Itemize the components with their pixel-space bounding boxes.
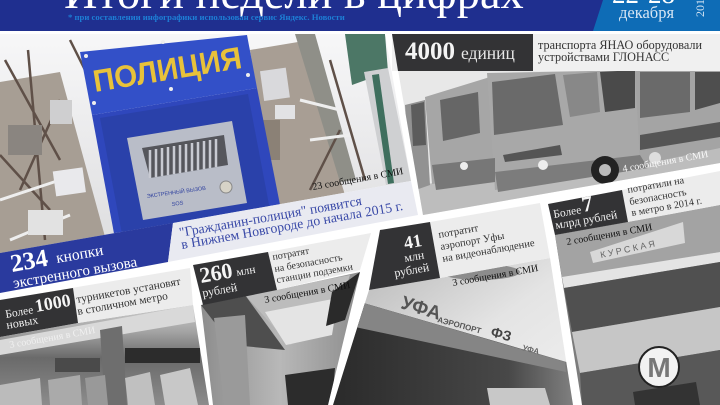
date block: декабря [619, 3, 674, 22]
stat: 41 million: млн [403, 248, 426, 265]
intercom plate [127, 121, 247, 220]
stat: 41 million [369, 203, 550, 290]
stat: 4000 units [392, 34, 720, 71]
photo: police call box [0, 34, 420, 259]
media count: buses: 4 сообщения в СМИ [622, 149, 709, 175]
stat: 7 billion: Более [552, 204, 582, 221]
photo: Ufa airport: УФА [521, 343, 541, 356]
stat: 234 buttons: кнопки [55, 242, 105, 267]
stat: 4000 units: транспорта ЯНАО оборудовали [538, 38, 702, 52]
stat: 234 buttons: 234 [8, 245, 50, 278]
metro sign [639, 347, 679, 387]
media count: airport: 3 сообщения в СМИ [452, 263, 539, 289]
stat: 7 billion: в метро в 2014 г. [631, 196, 703, 219]
media count: station: 3 сообщения в СМИ [264, 280, 351, 306]
photo: Ufa airport: ФЗ [489, 323, 514, 344]
stat: 4000 units: единиц [461, 43, 515, 63]
stat: 1000 turnstiles [0, 268, 193, 337]
stat: 7 billion: потратили на [627, 175, 685, 196]
media count: turnstiles: 3 сообщения в СМИ [9, 325, 96, 351]
intercom plate: SOS [171, 200, 184, 208]
stat: 260 million: 260 [198, 258, 234, 288]
stat: 260 million: потратят [272, 246, 311, 263]
photo: Ufa airport: АЭРОПОРТ [436, 315, 482, 336]
stat: 260 million: станции подземки [276, 262, 354, 286]
stat: 234 buttons [0, 223, 173, 293]
police box sign: ПОЛИЦИЯ [90, 40, 244, 99]
photo: station [195, 270, 365, 405]
stat: 41 million: 41 [402, 230, 423, 253]
callout: citizen police: "Гражданин-полиция" появится [178, 193, 364, 240]
photo: buses [392, 70, 720, 220]
stat: 234 buttons: экстренного вызова [12, 254, 139, 292]
stat: 41 million: потратит [438, 223, 480, 241]
stat: 41 million: на видеонаблюдение [442, 238, 536, 265]
stat: 1000 turnstiles: новых [5, 313, 39, 332]
intercom plate: ЭКСТРЕННЫЙ ВЫЗОВ [146, 184, 207, 200]
date block [593, 0, 720, 31]
callout: citizen police: в Нижнем Новгороде до начала 2015 г. [180, 198, 404, 252]
stat: 1000 turnstiles: Более [4, 304, 34, 321]
callout: citizen police [168, 181, 418, 262]
stat: 7 billion: млрд рублей [554, 207, 619, 232]
media count: police: 23 сообщения в СМИ [312, 166, 404, 193]
police box body [92, 88, 280, 234]
stat: 7 billion: безопасность [629, 187, 688, 208]
photo: Ufa airport: УФА [399, 293, 444, 325]
header band [0, 0, 720, 31]
photo: Ufa airport [333, 258, 573, 405]
stat: 4000 units: 4000 [405, 38, 455, 65]
photo: turnstiles [0, 300, 215, 405]
stat: 1000 turnstiles: в столичном метро [76, 290, 169, 318]
media count: metro: 2 сообщения в СМИ [566, 222, 653, 248]
police box sign [80, 35, 257, 115]
stat: 7 billion: 7 [580, 190, 595, 217]
stat: 260 million: на безопасность [274, 252, 344, 275]
footnote: * при составлении инфографики использован сервис Яндекс. Новости [68, 12, 345, 22]
stat: 1000 turnstiles: турникетов установят [75, 276, 182, 306]
metro sign: М [647, 352, 671, 383]
stat: 4000 units: устройствами ГЛОНАСС [538, 50, 669, 64]
stat: 7 billion [548, 171, 720, 235]
photo: Kurskaya station [555, 205, 720, 405]
stat: 260 million: рублей [201, 280, 239, 300]
stat: 1000 turnstiles: 1000 [33, 290, 72, 316]
stat: 260 million [193, 233, 371, 305]
stat: 41 million: рублей [393, 260, 431, 280]
photo: Kurskaya station: КУРСКАЯ [599, 238, 658, 260]
stat: 41 million: аэропорт Уфы [440, 231, 505, 253]
stat: 260 million: млн [235, 264, 256, 279]
